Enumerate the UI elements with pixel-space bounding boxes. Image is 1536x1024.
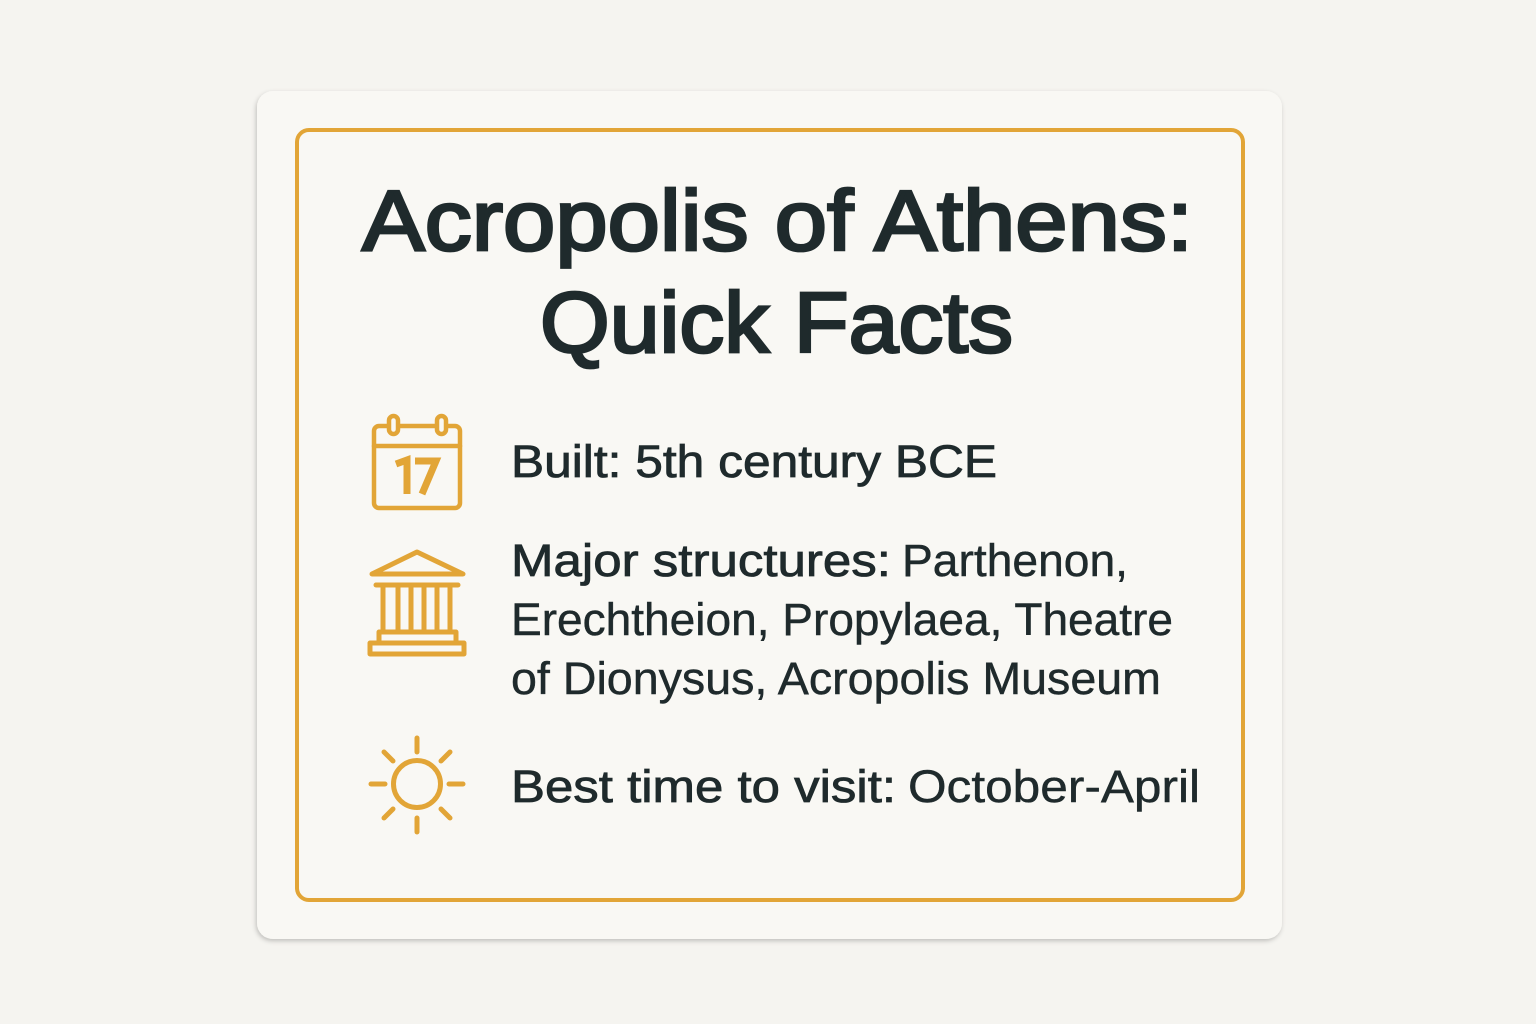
text: major structures [511,535,1173,704]
text: major structures: Major structures: [511,535,891,586]
text: best time to visit: October-April [908,761,1200,812]
panel: quick facts card [257,91,1282,939]
title: Quick Facts [540,276,1013,371]
text: major structures: of Dionysus, Acropolis Museum [511,653,1161,704]
icon: sun [371,738,463,832]
icon: greek temple [370,552,464,654]
panel border [297,130,1243,900]
text: best time to visit [511,761,1200,812]
text: major structures: Parthenon, [902,535,1128,586]
icon: calendar [374,416,460,508]
text: major structures: Erechtheion, Propylaea, Theatre [511,594,1173,645]
title [362,174,1193,371]
text: built: Built: 5th century BCE [511,436,997,487]
text: best time to visit: Best time to visit: [511,761,896,812]
title: Acropolis of Athens: [362,174,1193,269]
